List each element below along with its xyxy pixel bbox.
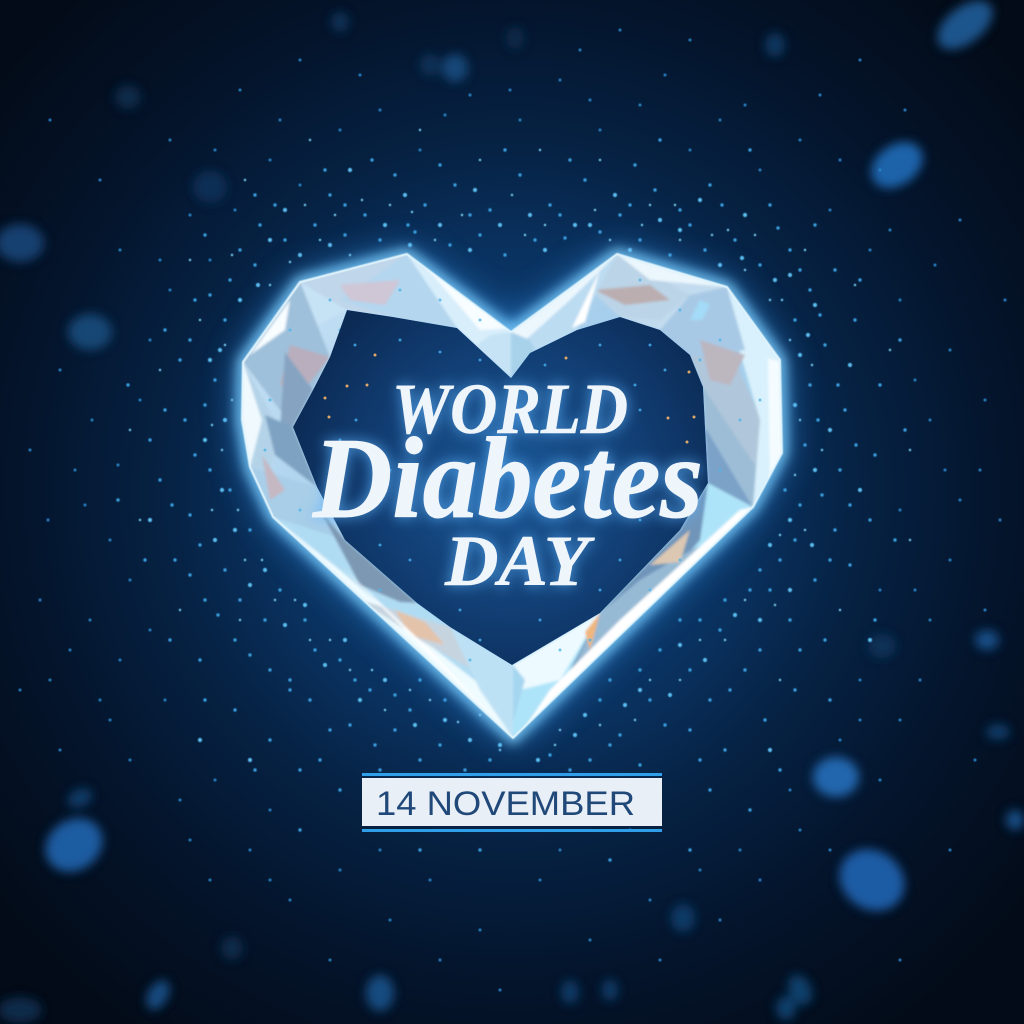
glow behind heart <box>242 254 782 738</box>
crystal heart frame <box>235 245 790 745</box>
banner bottom rule <box>362 829 662 832</box>
crystal sparkle dots <box>265 280 760 660</box>
top right facets <box>624 282 724 330</box>
banner top rule <box>362 773 662 776</box>
heart edge highlight <box>242 254 782 738</box>
title line: World: WORLD <box>392 369 628 449</box>
bottom left band <box>287 523 465 669</box>
banner box <box>362 778 662 826</box>
top left facets <box>304 260 394 308</box>
title line: Diabetes: Diabetes <box>312 415 703 543</box>
date banner <box>362 773 662 832</box>
title <box>312 369 703 601</box>
interior sparkles <box>325 340 710 640</box>
right facets <box>705 427 753 507</box>
heart interior <box>293 310 708 665</box>
title line: Day: DAY <box>444 521 595 601</box>
banner date text: 14 NOVEMBER <box>376 785 635 823</box>
bottom right band <box>513 483 753 738</box>
